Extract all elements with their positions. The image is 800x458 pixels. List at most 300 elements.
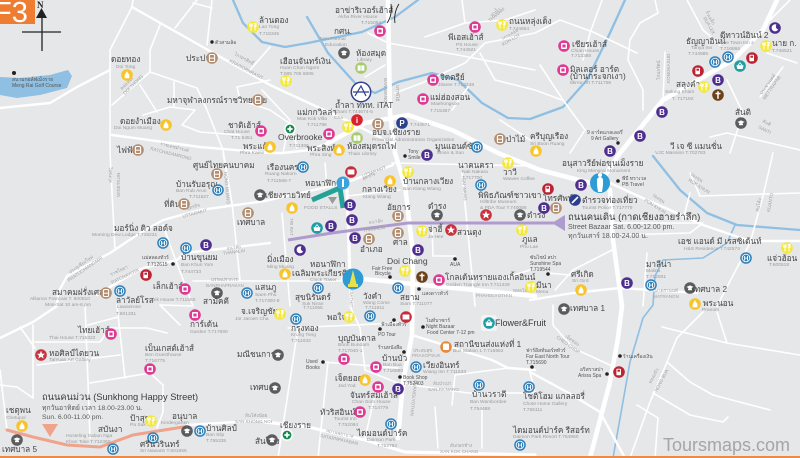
POI: Maehongson: Maehongson <box>431 101 460 107</box>
POI: Huan Chan Ngem: T.085 705 6085 <box>280 71 314 77</box>
POI: Lek House: Lek House T.711550 <box>151 297 196 303</box>
icon: bank <box>575 179 587 191</box>
POI: Wang Come: วังคำ <box>363 292 382 301</box>
POI: Ban Silp: บ้านศิลป์ <box>206 423 237 433</box>
POI: Klang Wiang <box>362 175 397 200</box>
road labels: พหลโยธิน <box>513 287 534 293</box>
POI: Ben Guesthouse: เบ็นเกสต์เฮ้าส์ <box>145 343 194 353</box>
POI: Mae Kok Villa <box>297 108 337 140</box>
road labels: UTTARAKIT <box>362 165 387 179</box>
POI: Salung Kham: T. 717192 <box>672 96 694 102</box>
road labels: RATCHAYOTA <box>110 267 141 285</box>
POI: Moon and Sun: Moon & Sun <box>437 150 464 156</box>
road labels: สันป่าเปา <box>433 380 452 386</box>
POI: Flower & Fruit: Flower&Fruit <box>495 318 547 328</box>
POI: Mae Kok Villa: T.711786 <box>307 122 327 128</box>
road labels: มาตรานนท์ <box>655 287 678 293</box>
POI: Doi Ngum Muang: ดอยงำเมือง <box>120 117 161 126</box>
POI: Jor Jaroen Chai: Jor Jaroen Cha <box>235 316 269 322</box>
POI: Boon Bundarn: บุญบันดาล <box>338 334 376 343</box>
POI: Mena <box>525 281 552 295</box>
POI: Faifa <box>116 144 144 156</box>
POI: info clock tower <box>305 176 350 190</box>
POI: info clock tower: หอนาฬิกา <box>305 179 341 188</box>
road labels: THANALAI <box>362 225 385 233</box>
icon: school <box>254 189 266 201</box>
POI: Boon Bundarn: Boon Bundarn <box>338 342 370 348</box>
POI: Library: Library <box>357 57 373 63</box>
POI: Mena: Mena <box>536 289 549 295</box>
POI: Klang Wiang: กลางเวียง <box>362 185 397 194</box>
POI: Hilltribe Museum: & PDA Tour T.740088 <box>480 205 527 211</box>
POI: Sunshine Spa: ซันไชน์ สปา <box>530 254 557 261</box>
POI: Daimon Park: ไดมอนด์ปาร์ค <box>356 428 407 438</box>
road labels: BANPHAPRAKAN <box>206 283 244 288</box>
POI: Wang Come <box>363 292 390 306</box>
road labels: NONG BUA <box>653 368 670 392</box>
POI: Pranom: Pranom <box>702 307 719 313</box>
POI: Chat House: Chat House <box>224 129 250 135</box>
golf course lake <box>0 70 72 98</box>
POI: Court: ศาล <box>393 238 408 247</box>
POI: Ruang Nakorn <box>265 161 309 184</box>
POI: Suan Tung: สวนตุง <box>457 228 482 237</box>
POI: Suan Tung <box>445 224 482 237</box>
POI: Thai Library <box>347 132 396 157</box>
POI: Ja Hee: Ja Hee <box>428 234 444 240</box>
POI: Night Bazaar: Night Bazaar <box>426 324 455 330</box>
POI: Arisra Spa: Arisra Spa <box>578 373 602 379</box>
POI: Ban Khun Yom: บ้านขุนยม <box>181 253 218 262</box>
POI: King Mengrai Monument: อนุสาวรีย์พ่อขุนเม็งราย <box>562 158 644 168</box>
POI: Pranom <box>689 298 734 313</box>
POI: Hilltribe Museum: Hilltribe Museum <box>480 199 516 205</box>
road labels: PRASOPSUK <box>412 353 442 358</box>
POI: Ban Klang Wiang: Ban Klang Wiang <box>403 186 441 192</box>
icon: star attraction <box>480 209 492 221</box>
POI: VJC Mansion: วี เจ ซี แมนชั่น <box>670 140 722 151</box>
POI: Salung Kham: Salung Kham <box>665 89 694 95</box>
POI: Sri Gird: ศรีเกิด <box>571 270 594 279</box>
POI: TAT office: i <box>356 116 358 125</box>
POI: Museum center: ศูนย์ไทยคนบาคม <box>193 160 255 171</box>
POI: Jitaree: Jitaree T.713248 <box>438 82 474 88</box>
POI: Ruang Nakorn: เรืองนคร <box>267 163 299 172</box>
POI: Tanya Inn <box>686 36 726 68</box>
callout: Street Bazaar: ทุกวันเสาร์ 18.00-24.00 น. <box>568 232 648 240</box>
POI: Mae Salong tour <box>142 254 175 268</box>
icon: church <box>416 271 428 283</box>
POI: Kindergarten <box>161 412 197 437</box>
POI: Chat House: ชาติเฮ้าส์ <box>228 120 261 130</box>
POI: Mr. K: นาย ก. <box>772 39 796 48</box>
icon: purple arrow <box>552 215 565 231</box>
POI: H&S Residence <box>678 236 761 264</box>
POI: Mr. K: T.748521 <box>772 48 792 54</box>
POI: Flower & Fruit <box>481 315 547 331</box>
POI: Mae Salong tour: T.712615 <box>147 262 168 268</box>
road labels: PHANOLYOTHIN <box>409 380 418 416</box>
POI: Lawanrose: Lawanrose <box>117 304 141 310</box>
road labels: NONG MUANG <box>223 172 231 205</box>
POI: Telephone office: โทรศัพท์ <box>543 193 573 203</box>
POI: Tourist Police: Tourist Police T.717779 <box>582 205 633 211</box>
road labels: KRAISORNRASIT <box>229 58 264 81</box>
road labels: ประสบสุข <box>413 348 433 354</box>
POI: Overbrooke <box>278 123 323 149</box>
icon: bank <box>200 239 212 251</box>
POI: Suk Niran: สุขนิรันดร์ <box>295 292 332 302</box>
POI: Ban Klang Wiang <box>402 166 453 192</box>
POI: Tony Smile <box>403 149 433 161</box>
rivers <box>233 0 800 458</box>
POI: Chetupol: Chetupol <box>6 415 26 421</box>
POI: Ban Rub Arun: Ban Rub Arun <box>176 188 207 194</box>
POI: King Mengrai Monument <box>562 158 644 193</box>
POI: Saen Phu: T.717300-8 <box>255 298 280 304</box>
POI: Salung Kham <box>665 80 710 102</box>
POI: Malina: มาลีน่า <box>646 260 671 269</box>
POI: Garden <box>189 309 228 335</box>
POI: Phu Lae <box>516 224 539 250</box>
POI: Lan Tong: T.715345 <box>259 31 279 37</box>
POI: Samakkhi: สามัคคี <box>203 297 229 306</box>
POI: Ja Hee: จ่าฮี้ <box>428 223 443 234</box>
north arrow: N <box>37 0 44 10</box>
POI: Jor Jaroen Chai <box>235 307 278 322</box>
POI: PS House: พีเอสเฮ้าส์ <box>448 32 484 42</box>
road labels: เจ็ดชอบ <box>564 332 582 347</box>
POI: Phra Kaew: Phra Kaew <box>240 150 264 156</box>
POI: Phu Lae: ภูแล <box>522 235 538 245</box>
POI: Klang Wiang: Klang Wiang <box>363 194 391 200</box>
road labels: KONOKASUD <box>666 53 671 83</box>
POI: Provincial Administration: Provincial Administration Organization <box>372 137 455 143</box>
POI: Chan Som House <box>350 390 398 411</box>
POI: Lawanrose: T.601331 <box>116 311 136 317</box>
POI: Wawee Coffee <box>502 157 535 182</box>
POI: Nak Nakara: Nak Nakara <box>462 169 488 175</box>
POI: Bus Station 1: สถานีขนส่งแห่งที่ 1 <box>454 338 522 349</box>
road labels: เกาะลอย <box>501 28 519 41</box>
teal food stall street marker <box>312 188 343 208</box>
road labels: DOI THONG <box>122 74 144 96</box>
POI: Sri Gird <box>571 270 594 296</box>
POI: Mahachula: มหาจุฬาลงกรณ์ราชวิทยาลัย <box>167 95 267 105</box>
POI: Pranom: พระนอน <box>703 299 734 308</box>
road labels: โกมลรัตน์ <box>655 59 661 80</box>
POI: Fah Muang Tour: ฟ้าเมืองทัวร์ <box>381 321 407 328</box>
POI: TAT office: Cha <box>334 115 343 121</box>
POI: Used Books <box>306 359 325 371</box>
POI: PS House: PS House <box>456 42 478 48</box>
road labels: ท่าน้ำ <box>489 6 502 18</box>
POI: H&S Residence: H&S Residence T.742574 <box>684 246 740 252</box>
POI: District office: อำเภอ <box>360 245 383 254</box>
road labels: METTRAPAB <box>762 75 782 101</box>
POI: Daimon Park Resort: Daimon Park Resort T.754960 <box>513 434 579 440</box>
road labels: ราชโยธา <box>109 263 129 277</box>
POI: Santi: สันติ <box>735 108 751 117</box>
road labels: อุตรกิจ <box>186 203 201 212</box>
road labels: SANTI <box>758 124 772 135</box>
road labels: สันโค้ง <box>754 198 762 212</box>
road labels: ร่องขุน <box>651 193 667 205</box>
POI: Municipal school 5: เทศบาล 5 <box>2 445 37 454</box>
POI: municipal south: เทศบาล <box>250 383 278 392</box>
POI: Daimon Park: Daimon Park <box>367 437 396 443</box>
POI: Jaew Hon <box>767 242 798 268</box>
POI: Suk Niran: Suk Niran <box>302 301 324 307</box>
POI: Nak Nakara <box>458 161 494 181</box>
POI: Used Books: Used <box>306 359 318 365</box>
POI: Chan Som House: จันทร์สมเฮ้าส์ <box>350 390 398 400</box>
POI: parking: T.744571 <box>410 122 430 128</box>
POI: Jaew Hon: แจ่วฮ้อน <box>767 254 798 263</box>
POI: Mae Kok Villa: แม่กกวิลล่า <box>297 108 337 117</box>
icon: bank <box>392 383 404 395</box>
POI: PB Travel: พีบี ทราเวล <box>622 175 646 182</box>
icon: bank <box>656 106 668 118</box>
POI: Arisra Spa: อริสราสปา <box>580 366 603 373</box>
road labels: สันกอกช้าง <box>450 442 472 448</box>
POI: Jor Jaroen Chai: จ.เจริญชัย <box>241 307 278 316</box>
POI: Doi Ngum Muang: Doi Ngum Muang <box>114 125 152 131</box>
POI: Phra Sing <box>307 143 345 158</box>
POI: Salung Kham: สลุงคำ <box>676 80 700 89</box>
POI: Prosecutor <box>387 203 411 222</box>
POI: Museum center <box>193 160 255 180</box>
POI: Siam: Siam T.711077 <box>400 301 432 307</box>
POI: Ban Rub Arun: T.711627 <box>189 194 209 200</box>
POI: Nak Nakara: T.717700 <box>462 175 482 181</box>
road labels: ราชเดชดำรงค์ <box>160 140 190 153</box>
POI: Thanon Lung Deng <box>496 16 552 32</box>
POI: Municipal school 2 <box>684 282 727 294</box>
POI: Ben Guesthouse <box>144 343 194 375</box>
POI: Non Formal Education: กศน. <box>334 27 352 36</box>
icon: church <box>712 89 724 101</box>
POI: Lawanrose <box>116 295 154 317</box>
POI: Overbrooke: Overbrooke <box>278 132 323 142</box>
POI: Damrong <box>428 202 446 221</box>
icon: hotel <box>180 242 192 254</box>
POI: Ban Warsbordee: Ban Warsbordee <box>470 399 507 405</box>
POI: Phra Sing: Phra Sing <box>310 152 332 158</box>
POI: Lan Tong <box>247 16 288 37</box>
POI: Wiang Inn: เวียงอินทร์ <box>423 360 460 370</box>
POI: TAT office <box>334 99 393 133</box>
POI: upper row: T.711055 <box>303 305 323 311</box>
POI: Ban Warsbordee <box>470 379 507 412</box>
POI: Doi Tong: ดอยทอง <box>111 55 140 64</box>
POI: Sri Nawarin: Sri Nawarin T.601655 <box>140 448 187 454</box>
POI: Tourist Inn <box>320 406 366 428</box>
walking street: Sat bazaar purple line <box>288 223 555 240</box>
POI: Golden Triangle Inn <box>433 271 536 288</box>
POI: PB Travel: PB Travel <box>622 182 644 188</box>
POI: PS House <box>448 21 484 53</box>
POI: Ban Rub Arun <box>176 180 224 200</box>
POI: Tony Smile: Smile <box>408 155 421 161</box>
POI: Wawee Coffee: Wawee Coffee <box>503 176 535 182</box>
road labels: รั้วเหล็ก <box>704 9 718 26</box>
POI: Pa Suk: Pa Suk <box>130 422 146 428</box>
POI: Maehongson: T.715367 <box>430 108 450 114</box>
road labels: RUA LEK <box>702 16 717 36</box>
bottom orange rule <box>0 456 800 458</box>
POI: Saen Phu <box>241 283 280 304</box>
road labels: บรรพปราการ <box>211 277 238 282</box>
POI: Mirror Art: Mirror Art T.711756 <box>570 80 611 86</box>
POI: Thai House <box>49 325 117 341</box>
walking street: Sunkhong orange line <box>7 427 183 447</box>
POI: Chian House: เชียรเฮ้าส์ <box>572 39 607 49</box>
road labels: ดอยทอง <box>119 76 134 91</box>
POI: Maehongson: แม่ฮ่องสอน <box>430 93 471 102</box>
POI: VJC Mansion: VJC Mansion T.702783 <box>655 150 706 156</box>
POI: Tourist Inn: Tourist Inn <box>334 416 357 422</box>
POI: Saeng Dao Tour: แสงดาวทัวร์ <box>422 290 449 297</box>
POI: Sri Gird: Sri Gird <box>572 278 589 284</box>
POI: Chian House <box>558 39 607 59</box>
POI: Thanon Lung Deng: ถนนหลุ่งเด็ง <box>509 16 552 26</box>
POI: Tourist Inn: ทัวริสอินน์ <box>320 407 356 417</box>
POI: Kindergarten: อนุบาล <box>172 412 197 421</box>
POI: 9 Art Gallery: 9 Art Gallery <box>591 136 619 142</box>
POI: Thai Library: Thain Library <box>348 151 377 157</box>
POI: Library: ห้องสมุด <box>356 49 386 58</box>
POI: Prapa: ประปา <box>186 54 210 63</box>
road labels: ROK KHUN <box>687 178 711 195</box>
icon: government <box>550 202 562 214</box>
POI: Golden Triangle Inn: โกลเด้นทรายแองเกิ้ลอินน์ <box>445 271 536 282</box>
POI: Malina: Malina <box>646 268 661 274</box>
POI: Golden Triangle Inn: Golden Triangle Inn T.711339 <box>446 282 510 288</box>
POI: Ban Bua <box>370 354 407 374</box>
POI: AUA: AUA <box>450 262 461 268</box>
road labels: THANAM <box>487 6 506 23</box>
POI: Far East North Tour <box>526 347 570 369</box>
POI: Mae Kok Villa: Mae Kok Villa <box>297 116 327 122</box>
POI: Pa Suk: ป้าสุข <box>130 414 150 423</box>
POI: Moon and Sun: มูนแอนด์ซัน <box>435 141 479 152</box>
POI: Sunshine Spa: T.719544 <box>530 267 551 273</box>
POI: Krung Tong: T.711033 <box>291 338 311 344</box>
POI: Doi Ngum Muang <box>114 117 172 131</box>
POI: Court <box>392 227 408 247</box>
POI: Krung Tong <box>290 313 319 344</box>
POI: parking <box>396 117 430 129</box>
road labels: RATCHADAMRONG <box>150 146 193 161</box>
POI: Mena: มีนา <box>536 281 552 290</box>
POI: Book shop north: ร้านหนังสือ <box>378 344 402 351</box>
POI: Dee Town Inn 2: Dee Town Inn 2 <box>720 40 754 46</box>
callout: Sunkhong Happy Street: Sun. 6.00-11.00 pm. <box>42 414 103 421</box>
POI: Ban Warsbordee: T.754488 <box>470 406 490 412</box>
callout: Street Bazaar: ถนนคนเดิน (กาดเชียงฮายรำลึก) <box>568 211 700 223</box>
road labels: ธนาลัย <box>226 243 241 251</box>
icon: fuel <box>140 269 152 281</box>
POI: TaiYuan Art Gallery: หอศิลป์ไตยวน <box>49 348 100 358</box>
POI: Akha River House: Akha River House <box>338 14 378 20</box>
POI: Huan Chan Ngem: เฮือนจันทร์เงิน <box>280 56 331 66</box>
POI: Damrong: ดำรง <box>428 202 446 211</box>
POI: Dee Town Inn 2: T.716866 <box>720 46 740 52</box>
POI: golf course: สนามกอล์ฟเม็งราย <box>12 75 53 83</box>
road labels: สันติ <box>762 118 772 127</box>
POI: Police station <box>514 209 545 221</box>
POI: Ruang Nakorn: Ruang Nakorn <box>265 171 297 177</box>
POI: Sabun Nga <box>66 425 122 455</box>
POI: Dee Town Inn 2 <box>720 30 769 63</box>
POI: Chote Home Gallery <box>523 381 586 413</box>
POI: Mae Salong tour: แม่สลองทัวร์ <box>142 254 169 261</box>
POI: Chote Home Gallery: Chote Home Gallery <box>523 401 568 407</box>
icon: bank <box>412 244 424 256</box>
POI: Food Stalls: FOOD STALLS <box>304 205 338 211</box>
POI: schools south <box>237 349 284 361</box>
POI: Sri Boon Ruang: ครีบุญเรือง <box>530 132 568 141</box>
POI: Jed Yod <box>335 373 371 389</box>
POI: Ban Khun Yom: Ban Khun Yom <box>181 262 213 268</box>
POI: Clock tower: หอนาฬิกา <box>310 260 346 269</box>
icon: fuel station <box>613 366 625 378</box>
POI: Tourist Police: ตำรวจท่องเที่ยว <box>582 194 638 205</box>
icon: bank <box>344 199 356 211</box>
road labels: SUKSATHIT <box>349 282 354 308</box>
road labels: KUANTO <box>766 192 774 212</box>
POI: Provincial Administration <box>372 118 455 143</box>
POI: Provincial Administration: อบจ.เชียงราย <box>372 128 420 137</box>
POI: Wawee Coffee: วาวี <box>503 168 517 177</box>
POI: Fair Free Bicycle: Bicycle <box>375 271 391 277</box>
POI: Chiang Rai Wittaya <box>265 190 311 214</box>
POI: Book Shop: Book Shop <box>403 375 428 381</box>
road labels: หนองบัว <box>647 367 660 384</box>
POI: Ming Muang: มิ่งเมือง <box>267 253 294 264</box>
POI: Huan Chan Ngem: Huan Chan Ngem <box>280 65 319 71</box>
POI: Clock tower: เฉลิมพระเกียรติ <box>292 269 347 278</box>
POI: Ben Guesthouse: Ben Guesthouse <box>145 352 182 358</box>
POI: 9 Art Gallery <box>587 129 623 145</box>
POI: parking: P <box>399 119 405 128</box>
POI: Maehongson <box>417 93 471 114</box>
POI: Tanya Inn: T.744985 <box>688 51 708 57</box>
POI: Non Formal Education <box>320 27 352 59</box>
POI: Jitaree <box>427 72 474 88</box>
icon: guest house <box>372 381 384 393</box>
POI: Overbrooke: T.711366 <box>289 143 309 149</box>
POI: VJC Mansion <box>655 140 722 156</box>
POI: District office <box>360 233 383 254</box>
road labels: ประชาเมตต์ <box>758 72 777 96</box>
POI: Municipal school 1: เทศบาล 1 <box>570 304 605 313</box>
icon: bank <box>634 130 646 142</box>
POI: Ruang Nakorn: T.711566-7 <box>267 178 291 184</box>
icon: hotel <box>114 285 126 297</box>
POI: Siam: สยาม <box>400 293 420 302</box>
POI: Municipal school 1 <box>558 303 605 315</box>
POI: Book Shop: T.752403 <box>403 381 424 387</box>
road labels: SATARNPAYABAN <box>320 433 359 446</box>
POI: Chiang Rai hospital: เชียงราย <box>280 421 311 430</box>
POI: Nak Nakara: นาคนครา <box>458 161 494 170</box>
POI: Non Formal Education: Education <box>325 42 347 48</box>
road labels: ไกรสรสิทธิ์ <box>233 49 257 67</box>
icon: orange arrow <box>42 424 58 437</box>
POI: Fair Free Bicycle: Fair Free <box>372 266 392 272</box>
